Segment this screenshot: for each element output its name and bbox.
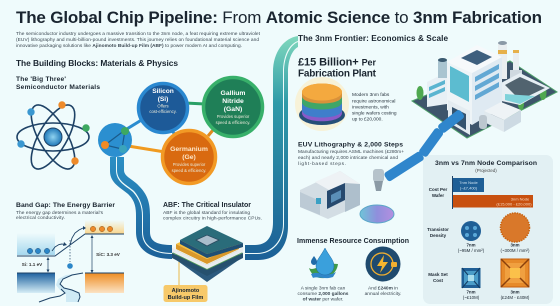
text: fab cost: single wafers costing [352,110,397,116]
text: electricity: annual electricity. [365,291,401,297]
text: fab cost [352,92,397,122]
row label: transistor density [427,227,449,238]
material: silicon: cost-efficiency. [149,109,177,114]
section: EUV text: Manufacturing requires ASML machines (£280m+ [298,149,404,155]
connectors between materials [122,103,213,152]
text: 7nm density: (~95M / mm²) [458,248,485,253]
illustration: fab factory [412,41,557,138]
heading: 3nm frontier: The 3nm Frontier: Economics & Scale [298,34,448,43]
text: fab cost: investments, with [352,104,389,110]
text: 7nm mask [463,290,480,300]
intro text [16,31,261,49]
river stream [39,273,83,302]
material: germanium: speed & efficiency. [172,168,206,173]
material: silicon: Silicon [152,88,174,95]
illustration: EUV machine [300,171,360,219]
panel heading: (Projected) [475,168,497,173]
pipe: left branch [110,157,172,259]
title: The Global Chip Pipeline: From Atomic Science to 3nm Fabrication [16,8,542,27]
text: water: consume 2,000 gallons [298,291,349,297]
main block [447,62,472,125]
chart: band gap diagram: Si: 1.1 eV [22,262,43,267]
text: 3nm mask [501,290,530,300]
bar chart: cost per wafer: (£15,000 - £20,000) [496,202,532,206]
material: germanium: Germanium [170,146,208,153]
icon: ABF chip stack [172,226,243,285]
material: germanium [162,130,216,184]
pipe: factory to nozzle [384,110,464,182]
intro text: (EUV) lithography and multi-billion-pound investments. This journey relies on foundational material science and [16,37,259,43]
material: silicon: (Si) [158,96,168,103]
label: Ajinomoto film: Ajinomoto [172,288,200,294]
section: EUV text: EUV Lithography & 2,000 Steps [298,142,403,148]
row label: transistor density: Transistor [427,227,449,232]
material: gallium nitride [204,78,262,136]
text: 7nm density [458,242,485,253]
row label: mask set cost [428,272,448,283]
section: band gap heading: The energy gap determines a material's [16,210,104,216]
material: gallium nitride: (GaN) [224,106,242,113]
text: 3nm mask: (£24M - £40M) [501,295,530,300]
icon: nozzle [373,169,384,191]
section: resources heading: Immense Resource Consumption [297,238,409,245]
bar chart: cost per wafer: 7nm Node [459,180,478,185]
icon: water [309,248,338,278]
heading: big three [16,76,100,91]
panel heading [435,160,537,173]
text: 3nm density [501,242,530,253]
text: fab cost: Modern 3nm fabs [352,92,390,98]
icon: 3nm mask [501,259,529,287]
chart: band gap diagram [17,220,124,293]
section: ABF text: complex circuitry in high-performance CPUs. [163,216,262,222]
material: silicon: Offers [157,104,169,108]
material: gallium nitride: Nitride [222,98,244,105]
chart: band gap diagram: SiC: 3.3 eV [96,252,121,257]
stat: 15 billion [298,56,377,80]
bar chart: cost per wafer: (~£7,400) [460,186,478,190]
section: band gap heading: electrical conductivity. [16,215,65,221]
stat: 15 billion: Fabrication Plant [298,68,377,80]
icon: atom [17,99,90,175]
text: 7nm mask: 7nm [466,290,476,294]
text: electricity [365,286,401,297]
row label: mask set cost: Mask Set [428,272,448,277]
panel: node comparison [423,155,553,304]
intro text: The semiconductor industry undergoes a massive transition to the 3nm node, a feat requiring extreme ultraviolet [16,31,261,37]
bar chart: cost per wafer: 3nm Node [511,196,530,202]
text: water: of water per wafer. [303,296,343,302]
text: electricity: And £240m in [368,286,398,292]
label: Ajinomoto film: Build-up Film [168,295,203,301]
row label: cost per wafer: Cost Per [429,187,447,192]
material: gallium nitride: speed & efficiency. [216,120,250,125]
section: band gap heading: Band Gap: The Energy Barrier [16,202,115,209]
icon: molecule hub [98,123,132,157]
heading: big three: The 'Big Three' [16,76,66,83]
section: EUV text: light-based steps. [298,161,346,167]
pipe: right trunk [245,36,298,260]
material: gallium nitride: Gallium [221,90,245,97]
heading: big three: Semiconductor Materials [16,84,100,91]
row label: transistor density: Density [430,233,447,238]
row label: cost per wafer: Wafer [432,193,444,198]
icon: wafer stack [295,77,349,131]
material: germanium: (Ge) [182,154,196,161]
icon: 3nm density [500,213,530,242]
material: gallium nitride: Provides superior [217,114,250,119]
section: ABF text: ABF: The Critical Insulator [163,202,251,209]
label: Ajinomoto film [164,285,208,302]
stat: 15 billion: £15 Billion+ Per [298,56,376,68]
material: germanium: Provides superior [173,162,206,167]
text: 3nm mask: 3nm [510,290,520,294]
icon: 7nm density [461,221,481,241]
heading: building blocks: The Building Blocks: Materials & Physics [16,58,178,68]
panel heading: 3nm vs 7nm Node Comparison [435,160,537,167]
intro text: innovative packaging solutions like Ajinomoto Build-up Film (ABF) to power modern AI and computing. [16,43,242,49]
material: silicon [138,84,188,132]
chimneys [498,43,507,79]
text: water [298,286,349,302]
icon: electricity [366,246,400,282]
text: fab cost: up to £20,000. [352,116,383,122]
text: 7nm density: 7nm [466,242,476,248]
text: water: A single 3nm fab can [301,286,346,292]
section: band gap heading [16,202,115,221]
section: ABF text: ABF is the global standard for insulating [163,210,250,216]
left annex [427,72,447,107]
right wing [497,73,550,105]
text: 7nm mask: (~£10M) [463,295,480,300]
row label: cost per wafer [429,187,447,198]
icon: 7nm mask [462,268,480,288]
small front unit [484,102,521,120]
bar chart: cost per wafer [452,176,533,209]
section: ABF text [163,202,262,222]
icon: wafer [360,205,394,223]
text: 3nm density: (~300M / mm²) [501,248,530,253]
text: 3nm density: 3nm [510,242,520,248]
text: fab cost: require astronomical [352,98,395,104]
section: EUV text: each) and nearly 2,000 intricate chemical and [298,155,398,161]
row label: mask set cost: Cost [433,278,444,283]
section: EUV text [298,142,404,167]
